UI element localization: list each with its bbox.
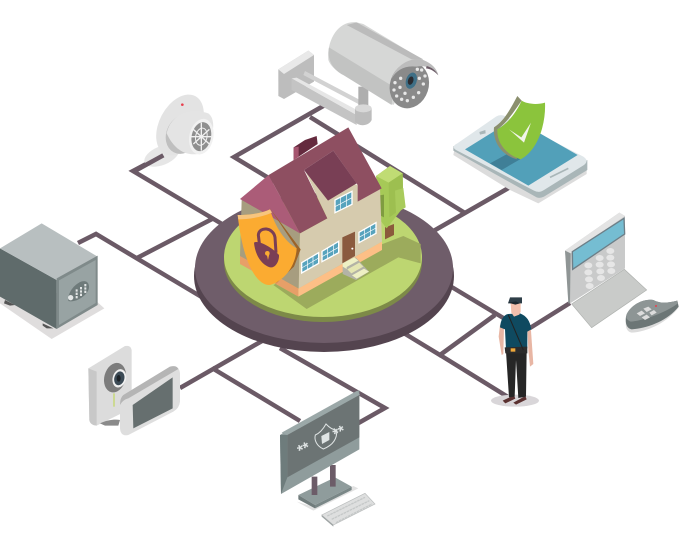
central platform [194,193,454,352]
belt [505,347,527,353]
cap [508,297,522,303]
safe door [59,260,96,325]
computer monitor and keyboard [280,390,375,527]
camera unit [88,346,132,426]
keyboard [322,493,375,527]
floor shadow [0,285,104,339]
feet [4,300,53,328]
windows [302,191,376,273]
camera body [328,22,423,105]
ground shadow [273,236,421,309]
shoes [503,395,527,405]
alarm keypad and key fob [565,213,679,333]
phone screen [465,119,578,186]
security guard [491,297,539,407]
safe [0,223,104,339]
video camera and screen [88,346,180,435]
dormer wall [305,171,358,218]
stand [312,465,336,495]
touch screen [120,366,180,435]
wall mount [278,51,314,99]
smoke detector [137,86,217,171]
hood [392,59,438,78]
green shield [494,96,545,159]
keypad panel [565,213,647,328]
shield and password: ** [295,439,313,460]
door [342,232,355,263]
orange shield [238,208,301,285]
connection wires [78,105,570,425]
tree [376,166,406,239]
arms [292,71,372,125]
phone shadow [453,147,587,203]
phone body [453,146,587,198]
shield and password [295,422,349,460]
trousers [506,350,527,398]
strap [508,315,523,350]
arms [499,325,504,355]
steps [343,257,369,280]
base [297,477,358,511]
shield and password: ** [330,422,349,443]
padlock [254,229,279,267]
walls and base [240,255,298,297]
security camera [278,22,438,125]
monitor [280,390,360,494]
check mark [509,123,531,143]
roof [240,175,300,233]
house with shield [238,127,421,309]
shadow [491,395,539,407]
key fob [626,300,679,333]
chimney [294,136,318,160]
torso [500,313,531,350]
safe lock panel [68,281,89,301]
camera lens face [384,57,435,113]
phone with green shield [453,96,587,203]
head [511,303,521,317]
keypad cover [572,269,647,328]
